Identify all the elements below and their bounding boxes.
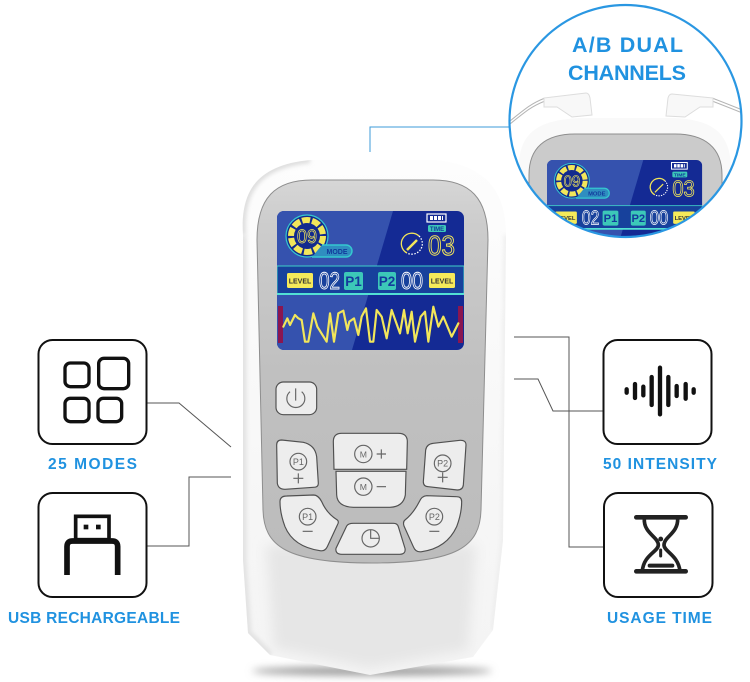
inset device body	[519, 118, 731, 240]
callout: A/B dual channels	[508, 4, 743, 238]
callout title: CHANNELS	[568, 61, 686, 85]
inset connectors	[544, 93, 713, 117]
inset LCD: LEVEL	[557, 216, 576, 222]
level band	[277, 266, 464, 294]
level tag right: LEVEL	[431, 278, 454, 286]
level digits right: 00	[401, 268, 423, 295]
feature: usage time	[604, 493, 712, 627]
power button	[276, 382, 317, 415]
level tag left: LEVEL	[289, 278, 312, 286]
intensity label: 50 INTENSITY	[603, 456, 718, 473]
USB icon box	[38, 493, 146, 597]
inset LCD: 02	[582, 208, 599, 230]
timer icon	[401, 233, 422, 254]
connector: modes to device	[147, 403, 231, 447]
inset LCD: LEVEL	[675, 216, 694, 222]
mode pill	[312, 245, 352, 257]
time tag	[428, 225, 446, 232]
level tag left	[287, 273, 313, 288]
red side bars	[278, 306, 463, 343]
inset LCD: 09	[564, 174, 580, 191]
battery icon	[427, 214, 446, 222]
device body	[243, 160, 506, 675]
USB label: USB RECHARGEABLE	[8, 610, 180, 627]
M plus button: M	[360, 449, 367, 459]
callout title	[568, 33, 686, 85]
icon: hourglass	[636, 517, 686, 571]
connector: usage time to device	[514, 337, 603, 547]
usage time icon box	[604, 493, 712, 597]
feature: 50 intensity	[603, 340, 718, 473]
inset cables	[510, 98, 740, 124]
callout ring	[510, 5, 742, 237]
connector: top blue leader line	[370, 127, 510, 152]
icon: USB plug	[67, 516, 118, 575]
feature: 25 modes	[38, 340, 146, 473]
P1 minus button: P1	[302, 512, 313, 522]
M minus button: M	[360, 482, 367, 492]
P1 tag: P1	[345, 274, 362, 289]
body edge shading	[243, 160, 506, 668]
icon: sound wave	[627, 368, 694, 414]
timer button	[336, 523, 405, 554]
P2 tag: P2	[379, 274, 395, 289]
time digits: 03	[428, 230, 455, 261]
inset LCD: P2	[631, 213, 645, 225]
inset panel	[528, 134, 722, 206]
P2 plus button: P2	[437, 459, 448, 469]
inset LCD: MODE	[588, 192, 606, 198]
icon: four squares	[65, 358, 129, 422]
device	[243, 160, 506, 676]
inset LCD: TIME	[674, 173, 686, 179]
P1 minus button	[280, 495, 338, 551]
connector: USB to device	[147, 477, 231, 546]
callout title: A/B DUAL	[572, 33, 683, 57]
inset LCD: 00	[650, 208, 668, 230]
connector: intensity to device	[514, 379, 603, 411]
keypad	[276, 382, 466, 554]
inset LCD	[547, 160, 702, 236]
modes icon box	[38, 340, 146, 444]
usage time label: USAGE TIME	[607, 610, 712, 627]
level tag right	[429, 273, 455, 288]
feature: USB rechargeable	[8, 493, 180, 627]
LCD screen	[277, 211, 464, 350]
P1 plus button	[277, 440, 318, 489]
mode dial	[286, 215, 328, 257]
P2 plus button	[423, 440, 466, 490]
P2 minus button	[404, 496, 462, 552]
inset LCD: 03	[672, 176, 695, 202]
body lower facet	[266, 545, 476, 668]
mode dial: 09	[297, 227, 317, 248]
screen background	[277, 211, 464, 350]
time tag: TIME	[430, 227, 444, 233]
control panel	[257, 180, 488, 563]
device shadow	[252, 666, 492, 676]
P2 minus button: P2	[429, 512, 440, 522]
inset LCD: P1	[604, 213, 617, 225]
P1 plus button: P1	[293, 457, 304, 467]
level digits left: 02	[319, 268, 340, 295]
screen reflection	[277, 211, 393, 350]
inset device zoom	[510, 92, 740, 236]
intensity icon box	[604, 340, 712, 444]
modes label: 25 MODES	[48, 456, 137, 473]
waveform	[283, 307, 458, 342]
M plus button	[333, 433, 407, 469]
M minus button	[336, 471, 406, 507]
callout circle	[510, 5, 742, 237]
mode pill: MODE	[326, 249, 348, 256]
